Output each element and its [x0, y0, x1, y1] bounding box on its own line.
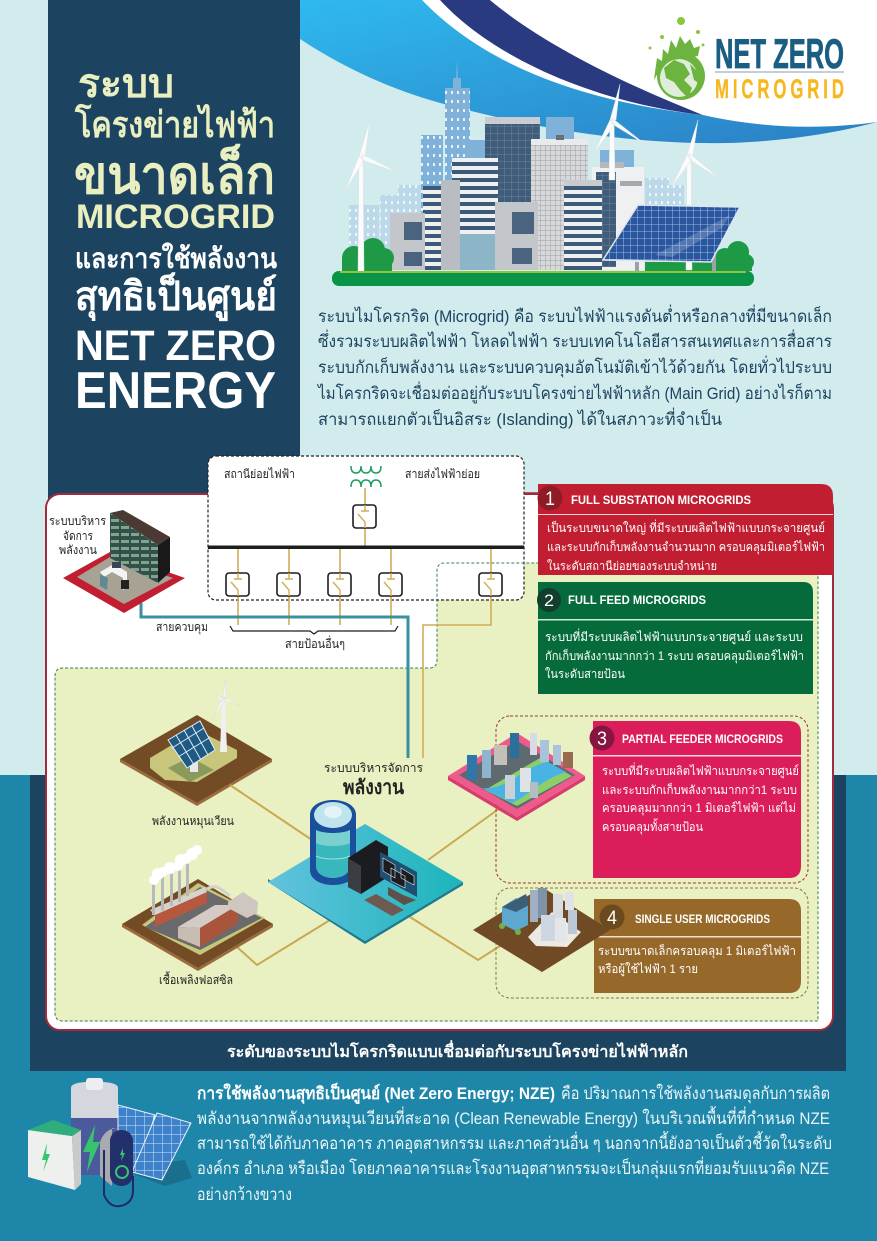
label: renewable: พลังงานหมุนเวียน	[152, 814, 234, 829]
NZE paragraph	[197, 1081, 832, 1204]
towers	[467, 733, 573, 799]
NZE paragraph: การใช้พลังงานสุทธิเป็นศูนย์ (Net Zero Energy; NZE)	[197, 1081, 555, 1105]
transformer	[351, 466, 381, 487]
intro paragraph: ระบบไมโครกริด (Microgrid) คือ ระบบไฟฟ้าแรงดันต่ำหรือกลางที่มีขนาดเล็ก	[318, 304, 832, 326]
body 1: และระบบกักเก็บพลังงานจำนวนมาก ครอบคลุมมิเตอร์ไฟฟ้า	[547, 539, 825, 555]
server room label	[49, 514, 106, 557]
label: energy: พลังงาน	[343, 777, 404, 799]
solar panels	[118, 1105, 191, 1180]
panel 1 full substation	[524, 484, 833, 575]
body 2	[545, 628, 804, 681]
dark glass tower	[485, 117, 540, 270]
badge 3	[590, 726, 614, 750]
bushes	[342, 238, 754, 271]
substation labels: สายส่งไฟฟ้าย่อย	[405, 467, 480, 481]
logo	[648, 17, 844, 104]
office cluster	[528, 888, 581, 947]
navy title panel	[48, 0, 300, 500]
diagram caption: ระดับของระบบไมโครกริดแบบเชื่อมต่อกับระบบโครงข่ายไฟฟ้าหลัก	[227, 1040, 688, 1061]
switches	[226, 505, 502, 596]
label: fossil: เชื้อเพลิงฟอสซิล	[159, 971, 233, 987]
panel 4 content: 4	[607, 908, 617, 929]
body 3: ครอบคลุมมากกว่า 1 มิเตอร์ไฟฟ้า แต่ไม่	[602, 801, 796, 816]
home and office tile	[473, 887, 610, 972]
cabinet	[28, 1120, 81, 1190]
body 2: ในระดับสายป้อน	[545, 667, 625, 681]
badge 1	[538, 486, 562, 510]
NZE paragraph: คือ ปริมาณการใช้พลังงานสมดุลกับการผลิต	[561, 1083, 830, 1104]
gray grid tower	[531, 135, 588, 270]
ground	[332, 271, 754, 286]
title line 3: ขนาดเล็ก	[74, 144, 275, 205]
bus bar	[208, 546, 524, 549]
control line	[141, 603, 408, 758]
title line 6: สุทธิเป็นศูนย์	[75, 271, 277, 322]
label: control line: สายควบคุม	[156, 620, 208, 635]
gray low block	[390, 213, 425, 270]
body 4: หรือผู้ใช้ไฟฟ้า 1 ราย	[598, 962, 698, 977]
diagram card	[46, 456, 833, 1030]
header swoosh	[249, 0, 877, 143]
striped tower left	[452, 158, 498, 270]
body 3	[602, 762, 799, 835]
server room label: ระบบบริหาร	[49, 514, 106, 528]
title line 4: MICROGRID	[76, 198, 275, 236]
body 4	[598, 943, 796, 977]
heading 4: SINGLE USER MICROGRIDS	[635, 914, 770, 926]
panel 3 partial feeder	[590, 721, 801, 878]
battery	[310, 800, 356, 885]
striped tower right	[564, 180, 602, 270]
substation box	[208, 456, 524, 600]
left plant building	[150, 887, 207, 927]
body 2: กักเก็บพลังงานมากกว่า 1 ระบบ ครอบคลุมมิเตอร์ไฟฟ้า	[545, 648, 804, 664]
label: energy management: ระบบบริหารจัดการ	[324, 761, 424, 775]
brace	[230, 626, 398, 634]
striped tower small	[423, 180, 460, 270]
intro paragraph	[316, 304, 832, 429]
intro paragraph: สามารถแยกตัวเป็นอิสระ (Islanding) ได้ในสภาวะที่จำเป็น	[318, 407, 722, 429]
computer tower	[348, 840, 388, 894]
body 1: ในระดับสถานีย่อยของระบบจำหน่าย	[547, 559, 717, 573]
monitor	[380, 852, 417, 905]
substation labels	[224, 467, 480, 481]
server room label: จัดการ	[63, 529, 93, 543]
title	[74, 62, 277, 420]
smoke	[149, 845, 202, 885]
logo MICROGRID: MICROGRID	[715, 74, 844, 104]
keyboard	[364, 894, 404, 916]
gold lines to energy hub	[230, 785, 500, 965]
body 3: และระบบกักเก็บพลังงานมากกว่า1 ระบบ	[602, 782, 797, 797]
body 3: ครอบคลุมทั้งสายป้อน	[602, 818, 703, 835]
right plant building	[178, 905, 238, 947]
gold feeder lines	[238, 488, 491, 758]
single user dashed frame	[496, 888, 808, 998]
renewable energy tile	[120, 680, 272, 806]
panel 4 background	[594, 899, 801, 993]
pipes	[207, 887, 230, 896]
solar panel	[168, 721, 215, 772]
city tile	[448, 733, 585, 821]
solar panel	[603, 205, 740, 274]
background top	[0, 0, 877, 775]
switch contacts	[231, 505, 495, 596]
fossil fuel tile	[122, 845, 273, 971]
heading 2: FULL FEED MICROGRIDS	[568, 593, 706, 607]
wind turbines	[345, 84, 721, 271]
heading 3: PARTIAL FEEDER MICROGRIDS	[622, 734, 783, 746]
panel 3 partial feeder: 3	[597, 729, 607, 750]
energy hub tile	[268, 800, 463, 944]
background bottom	[0, 775, 877, 1241]
body 4: ระบบขนาดเล็กครอบคลุม 1 มิเตอร์ไฟฟ้า	[598, 943, 796, 959]
body 2: ระบบที่มีระบบผลิตไฟฟ้าแบบกระจายศูนย์ และระบบ	[545, 628, 803, 645]
wind turbine	[212, 680, 241, 752]
big battery	[71, 1078, 118, 1175]
intro paragraph: ไมโครกริดจะเชื่อมต่ออยู่กับระบบโครงข่ายไฟฟ้าหลัก (Main Grid) อย่างไรก็ตาม	[316, 381, 832, 404]
icon: server room	[63, 510, 185, 613]
icon: battery, solar and charger	[28, 1078, 192, 1206]
charger	[100, 1128, 133, 1206]
body 1: เป็นระบบขนาดใหญ่ ที่มีระบบผลิตไฟฟ้าแบบกระจายศูนย์	[547, 519, 825, 536]
badge 4	[600, 904, 624, 930]
title line 1: ระบบ	[78, 62, 174, 106]
white right tower	[592, 162, 644, 270]
label: feeder lines: สายป้อนอื่นๆ	[285, 635, 345, 651]
NZE paragraph: อย่างกว้างขวาง	[197, 1185, 292, 1204]
city illustration	[332, 60, 754, 286]
substation labels: สถานีย่อยไฟฟ้า	[224, 467, 295, 481]
glass lobby	[458, 234, 496, 270]
title line 8: ENERGY	[75, 362, 276, 420]
title line 2: โครงข่ายไฟฟ้า	[74, 103, 275, 145]
partial feeder dashed frame	[496, 716, 808, 883]
intro paragraph: ระบบกักเก็บพลังงาน และระบบควบคุมอัตโนมัติเข้าไว้ด้วยกัน โดยทั่วไประบบ	[318, 355, 832, 378]
badge 2	[537, 588, 561, 612]
panel 1 full substation: 1	[545, 489, 555, 510]
heading 1: FULL SUBSTATION MICROGRIDS	[571, 493, 751, 507]
intro paragraph: ซึ่งรวมระบบผลิตไฟฟ้า โหลดไฟฟ้า ระบบเทคโนโลยีสารสนเทศและการสื่อสาร	[318, 329, 832, 351]
body 1	[547, 519, 825, 573]
microgrid zone	[55, 563, 818, 1021]
panel 4 content	[598, 904, 796, 977]
server room label: พลังงาน	[59, 543, 97, 557]
background buildings	[349, 60, 684, 270]
title line 7: NET ZERO	[75, 322, 276, 370]
title line 5: และการใช้พลังงาน	[75, 242, 277, 274]
panel 2 full feed	[537, 582, 813, 694]
logo globe	[648, 17, 705, 100]
card background	[46, 494, 833, 1030]
panel 2 full feed: 2	[544, 591, 554, 610]
gray mid block	[495, 202, 538, 270]
smoke stacks	[152, 864, 189, 915]
house	[499, 894, 529, 935]
lower navy panel	[30, 775, 846, 1071]
boiler unit	[228, 892, 258, 918]
body 3: ระบบที่มีระบบผลิตไฟฟ้าแบบกระจายศูนย์	[602, 762, 799, 779]
microgrid zone outline	[55, 563, 818, 1021]
